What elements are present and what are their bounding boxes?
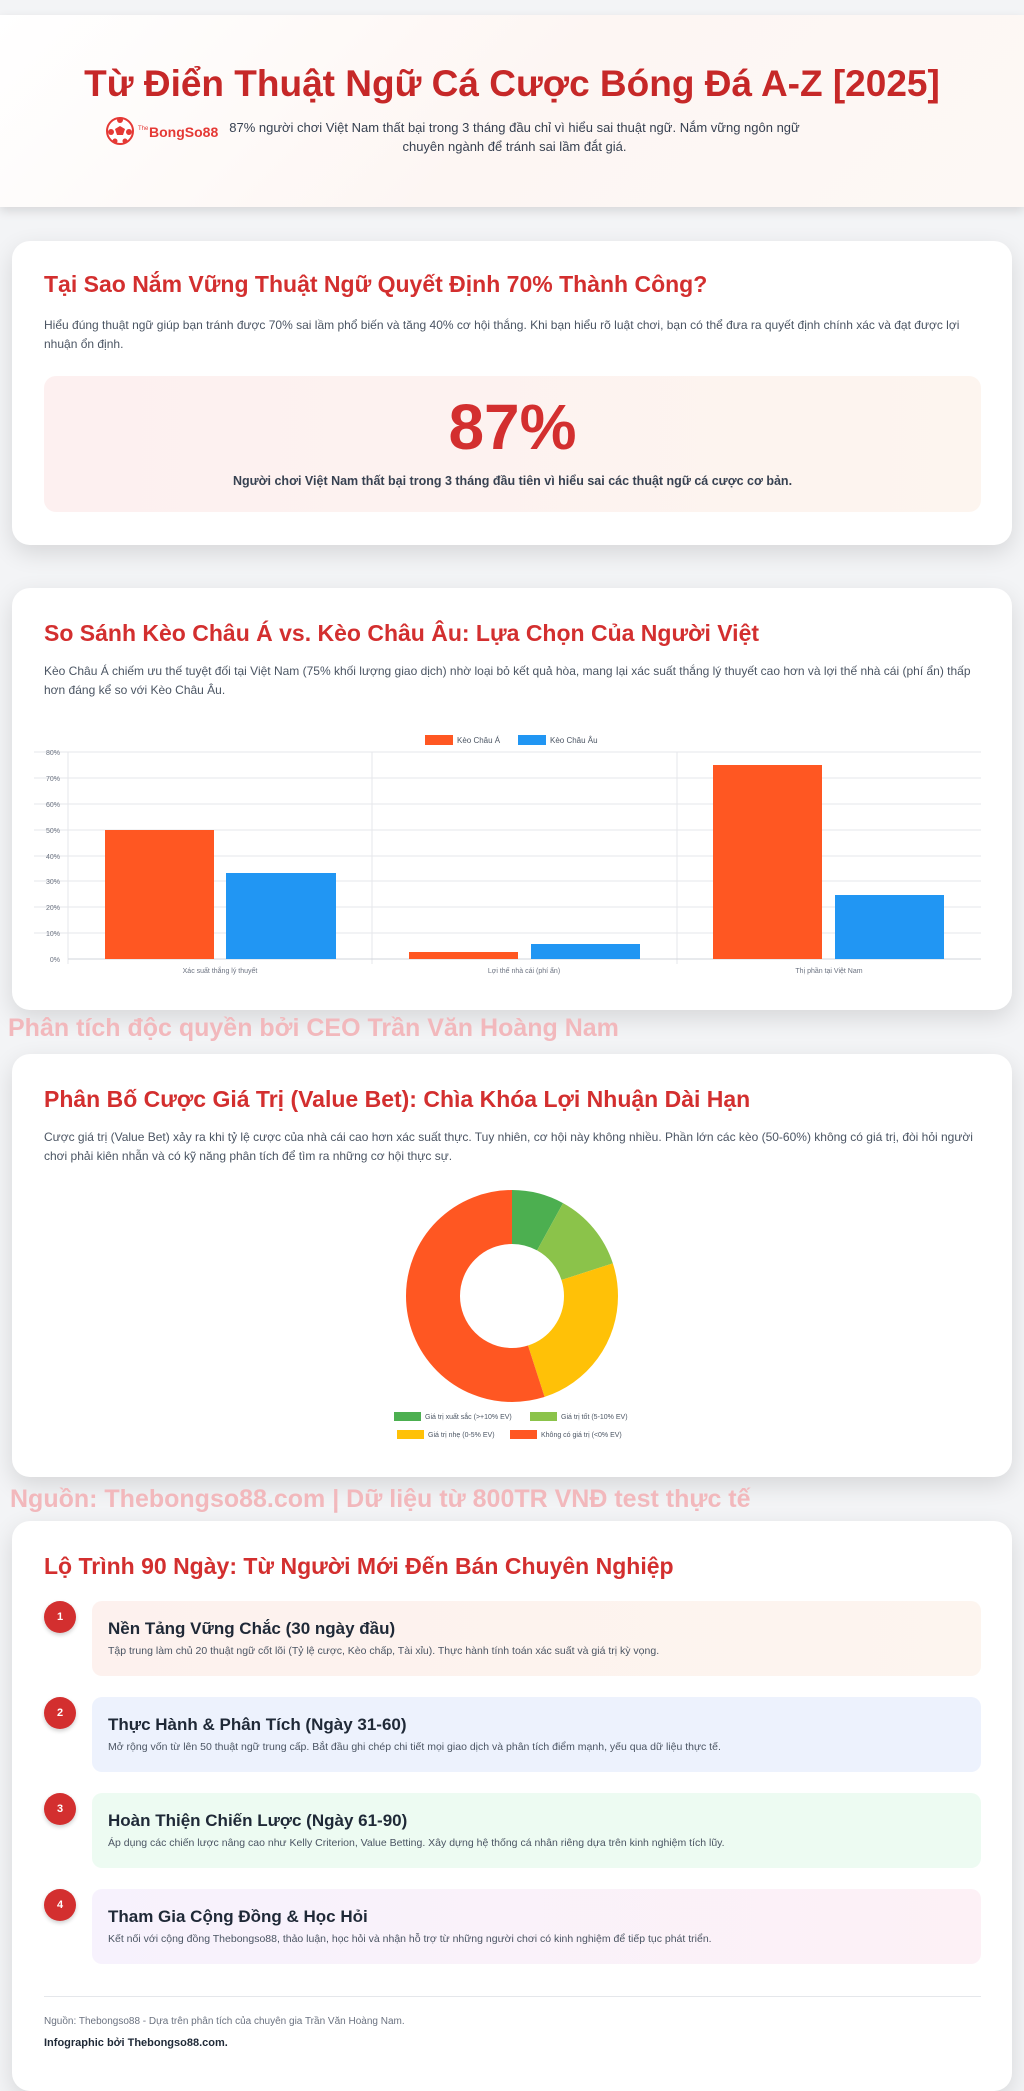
legend: Kèo Châu Á: [457, 736, 501, 745]
y axis labels: 10%: [46, 931, 60, 938]
heading: So Sánh Kèo Châu Á vs. Kèo Châu Âu: Lựa Chọn Của Người Việt: [44, 620, 759, 646]
heading: Phân Bố Cược Giá Trị (Value Bet): Chìa Khóa Lợi Nhuận Dài Hạn: [44, 1086, 750, 1112]
watermark: CEO: Phân tích độc quyền bởi CEO Trần Văn Hoàng Nam: [8, 1014, 619, 1042]
title: Từ Điển Thuật Ngữ Cá Cược Bóng Đá A-Z [2025]: [84, 63, 940, 104]
legend: [425, 735, 598, 745]
y axis labels: 50%: [46, 828, 60, 835]
step 3: Áp dụng các chiến lược nâng cao như Kelly Criterion, Value Betting. Xây dựng hệ thống cá nhân riêng dựa trên kinh nghiệm tích lũy.: [108, 1837, 725, 1849]
step 1: 1: [57, 1611, 63, 1623]
step 2: Thực Hành & Phân Tích (Ngày 31-60): [108, 1715, 407, 1734]
step 4: Tham Gia Cộng Đồng & Học Hỏi: [108, 1907, 368, 1926]
heading: Tại Sao Nắm Vững Thuật Ngữ Quyết Định 70% Thành Công?: [44, 271, 707, 297]
paragraph: Kèo Châu Á chiếm ưu thế tuyệt đối tại Việt Nam (75% khối lượng giao dịch) nhờ loại bỏ kết quả hòa, mang lại xác suất thắng lý thuyết cao hơn và lợi thế nhà cái (phí ẩn) thấp hơn đáng kể so với Kèo Châu Âu.: [44, 664, 971, 697]
stat caption: Người chơi Việt Nam thất bại trong 3 tháng đầu tiên vì hiểu sai các thuật ngữ cá cược cơ bản.: [233, 474, 792, 488]
y axis labels: 0%: [50, 957, 60, 964]
legend: Giá trị nhẹ (0-5% EV): [428, 1432, 495, 1439]
y axis labels: [46, 750, 60, 964]
step 1: Tập trung làm chủ 20 thuật ngữ cốt lõi (Tỷ lệ cược, Kèo chấp, Tài xỉu). Thực hành tính toán xác suất và giá trị kỳ vọng.: [108, 1645, 659, 1657]
step 3: [42, 1793, 981, 1868]
step 4: 4: [57, 1899, 63, 1911]
panel: asian vs european handicap: [12, 588, 1012, 1010]
step 2: Mở rộng vốn từ lên 50 thuật ngữ trung cấp. Bắt đầu ghi chép chi tiết mọi giao dịch và phân tích điểm mạnh, yếu qua dữ liệu thực tế.: [108, 1741, 721, 1753]
x axis labels: Lợi thế nhà cái (phí ẩn): [488, 966, 560, 975]
y axis labels: 70%: [46, 776, 60, 783]
donut chart: [394, 1190, 628, 1439]
subtitle: 87% người chơi Việt Nam thất bại trong 3 tháng đầu chỉ vì hiểu sai thuật ngữ. Nắm vững ngôn ngữ chuyên ngành để tránh sai lầm đắt giá.: [229, 120, 800, 154]
x axis labels: Xác suất thắng lý thuyết: [183, 966, 257, 975]
stat number: 87%: [448, 391, 577, 463]
footer source: Nguồn: Thebongso88 - Dựa trên phân tích của chuyên gia Trần Văn Hoàng Nam.: [44, 2016, 405, 2027]
y axis labels: 60%: [46, 802, 60, 809]
panel: 90-day roadmap: [12, 1521, 1012, 2091]
paragraph: Hiểu đúng thuật ngữ giúp bạn tránh được 70% sai lầm phổ biến và tăng 40% cơ hội thắng. Khi bạn hiểu rõ luật chơi, bạn có thể đưa ra quyết định chính xác và đạt được lợi nhuận ổn định.: [44, 318, 959, 351]
panel: why terminology: [12, 241, 1012, 545]
legend: Không có giá trị (<0% EV): [541, 1432, 622, 1439]
x axis labels: [183, 966, 863, 975]
panel: value bet distribution: [12, 1054, 1012, 1477]
bars: [105, 765, 944, 959]
step 2: 2: [57, 1707, 63, 1719]
header band: [0, 15, 1024, 207]
y axis labels: 80%: [46, 750, 60, 757]
x axis labels: Thị phần tại Việt Nam: [795, 966, 863, 975]
watermark: source: Nguồn: Thebongso88.com | Dữ liệu từ 800TR VNĐ test thực tế: [10, 1485, 751, 1513]
y axis labels: 30%: [46, 879, 60, 886]
logo: BongSo88: [149, 124, 218, 140]
step 1: [42, 1601, 981, 1676]
paragraph: Cược giá trị (Value Bet) xảy ra khi tỷ lệ cược của nhà cái cao hơn xác suất thực. Tuy nhiên, cơ hội này không nhiều. Phần lớn các kèo (50-60%) không có giá trị, đòi hỏi người chơi phải kiên nhẫn và có kỹ năng phân tích để tìm ra những cơ hội thực sự.: [44, 1130, 973, 1163]
step 2: [42, 1697, 981, 1772]
y axis labels: 20%: [46, 905, 60, 912]
step 1: Nền Tảng Vững Chắc (30 ngày đầu): [108, 1619, 395, 1638]
legend: Kèo Châu Âu: [550, 736, 598, 745]
heading: Lộ Trình 90 Ngày: Từ Người Mới Đến Bán Chuyên Nghiệp: [44, 1553, 674, 1579]
step 4: Kết nối với cộng đồng Thebongso88, thảo luận, học hỏi và nhận hỗ trợ từ những người chơi có kinh nghiệm để tiếp tục phát triển.: [108, 1933, 712, 1945]
step 4: [42, 1889, 981, 1964]
logo: The: [138, 126, 148, 132]
legend: Giá trị tốt (5-10% EV): [561, 1412, 628, 1421]
logo: [106, 117, 218, 145]
stat box: [44, 376, 981, 512]
bar chart: [34, 735, 981, 975]
footer credit: Infographic bởi Thebongso88.com.: [44, 2037, 228, 2049]
y axis labels: 40%: [46, 854, 60, 861]
legend: [394, 1412, 628, 1439]
step 3: Hoàn Thiện Chiến Lược (Ngày 61-90): [108, 1811, 407, 1830]
step 3: 3: [57, 1803, 63, 1815]
legend: Giá trị xuất sắc (>+10% EV): [425, 1412, 512, 1421]
